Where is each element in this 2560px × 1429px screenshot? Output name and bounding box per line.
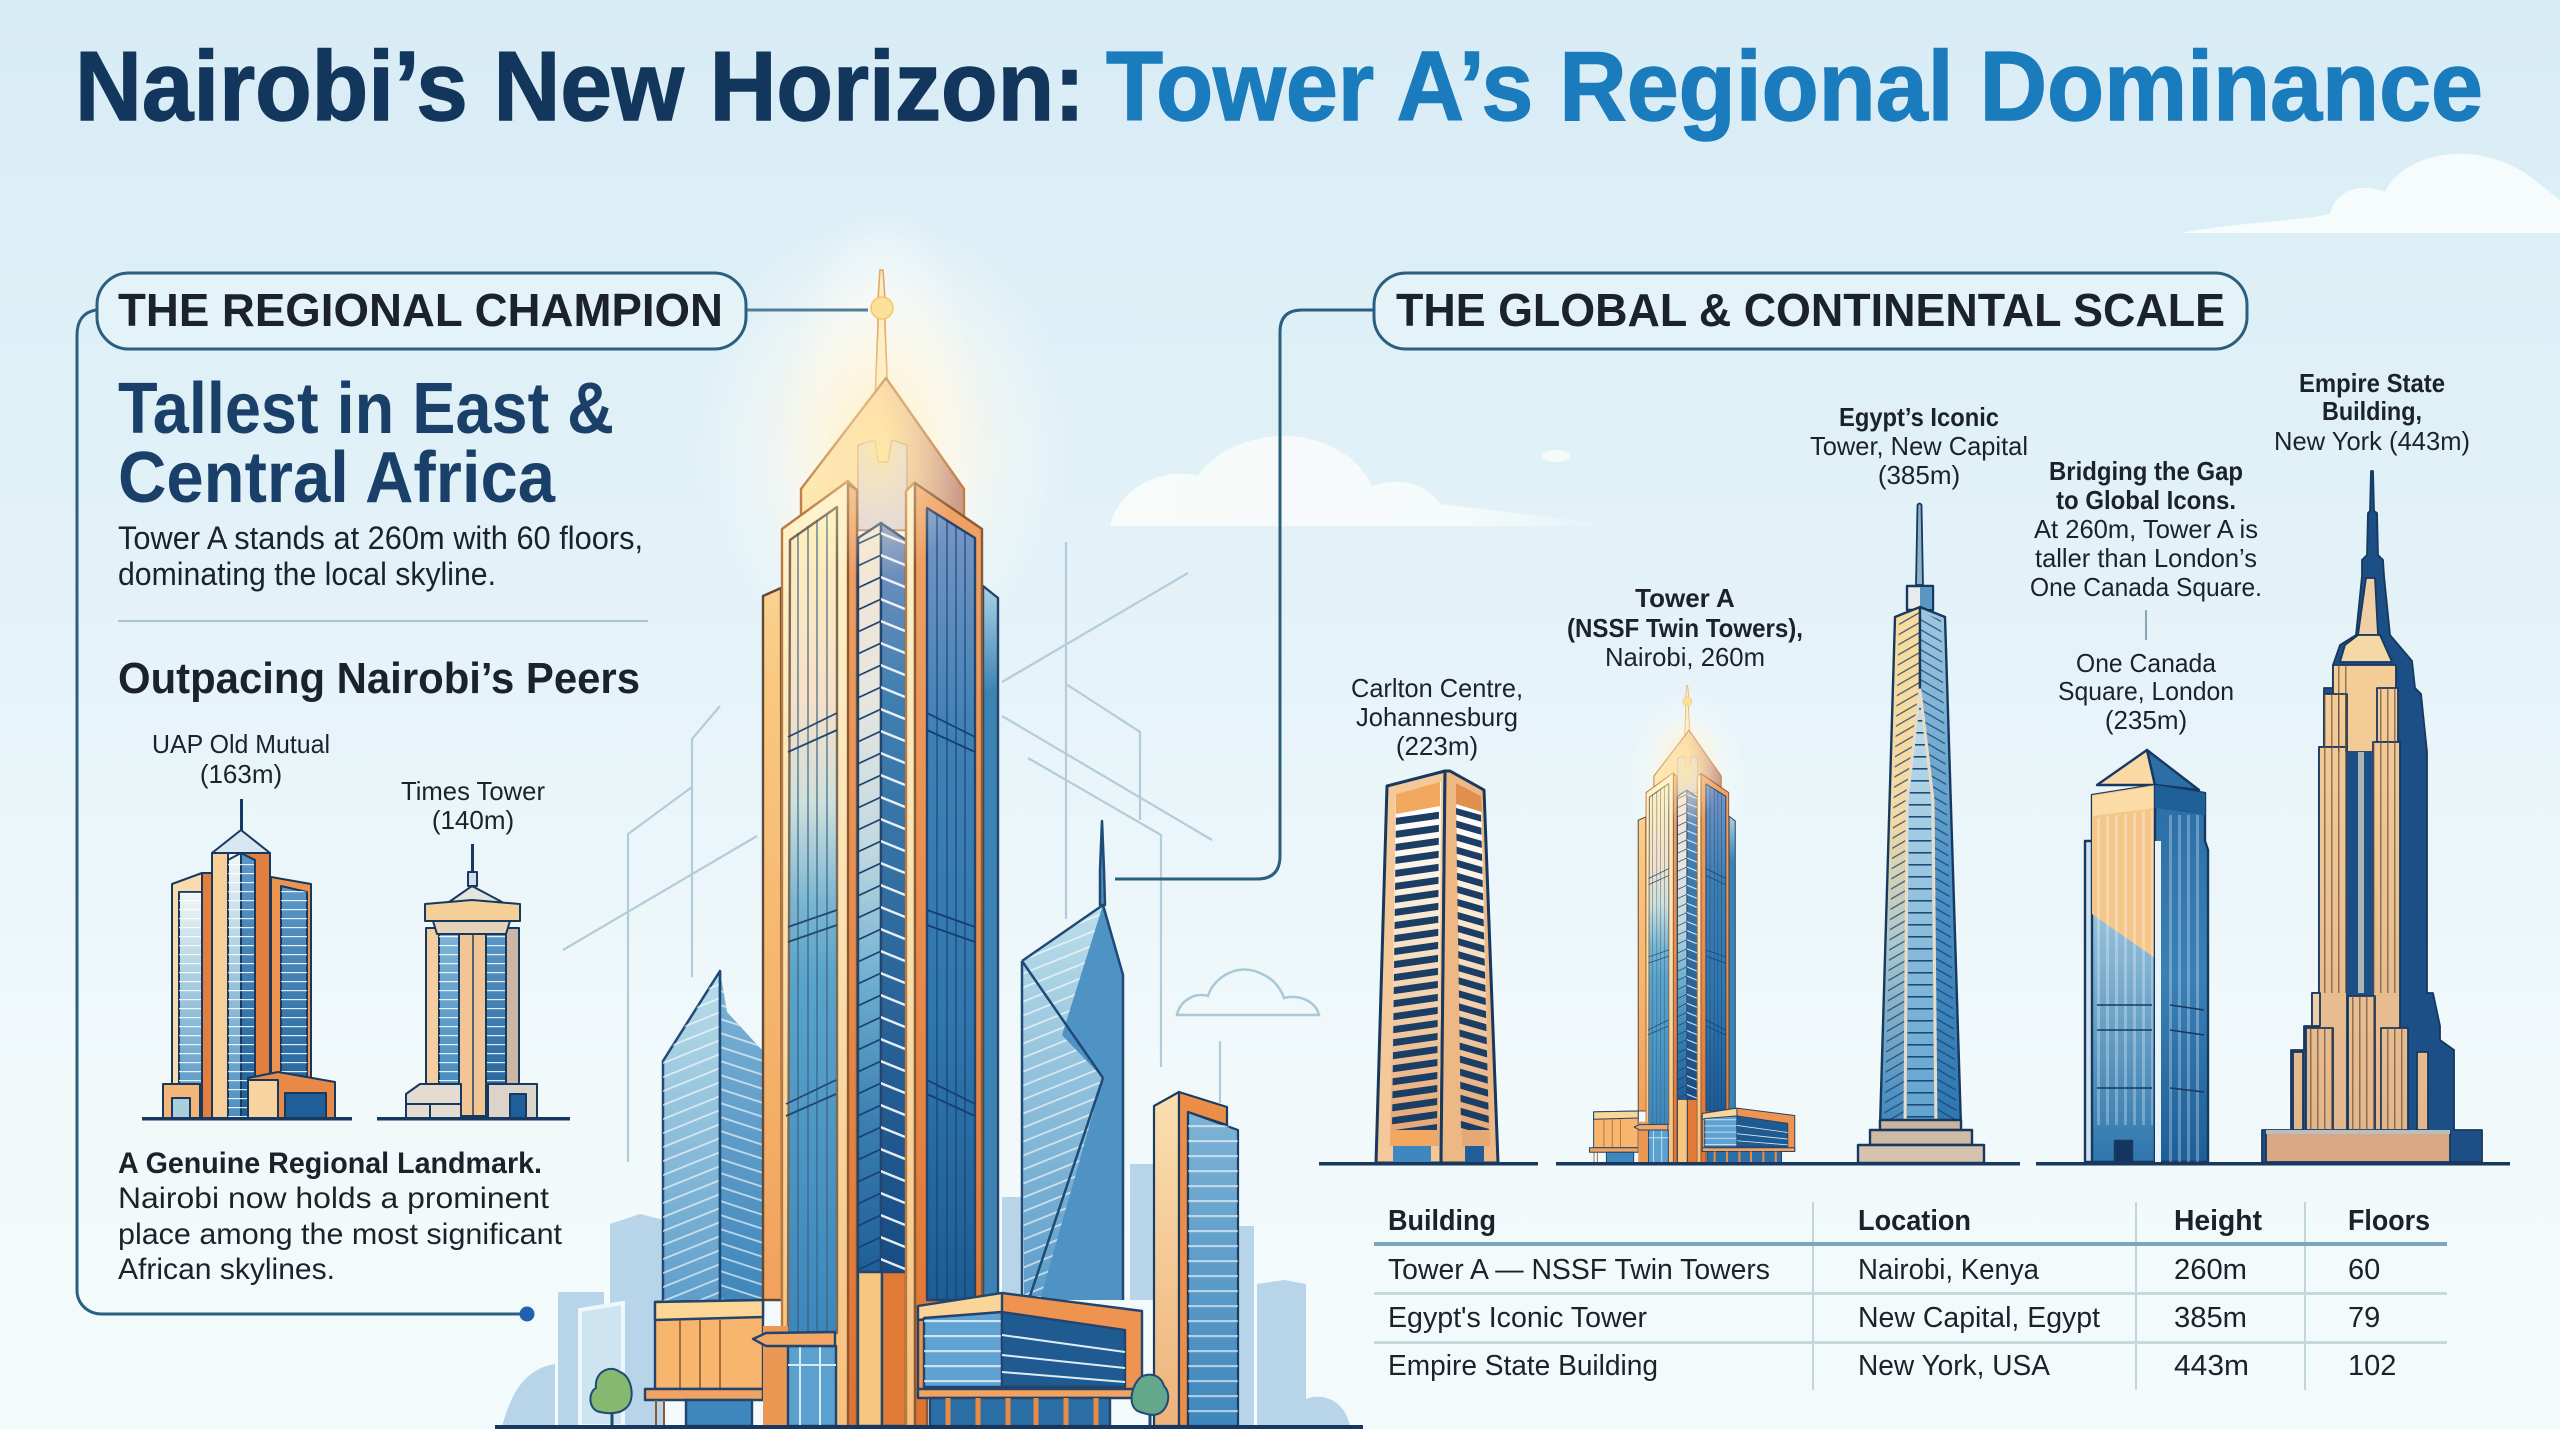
ground line: [495, 1425, 1363, 1429]
label: UAP Old Mutual: [152, 729, 330, 789]
label: Empire State Building: Empire State: [2299, 368, 2445, 398]
background city silhouettes: [502, 1164, 1350, 1426]
center column: [858, 523, 881, 1272]
table row: Empire: 443m: [2174, 1350, 2249, 1382]
label: Empire State Building: New York (443m): [2274, 426, 2470, 456]
table row: Tower A: 260m: [2174, 1254, 2247, 1286]
label: Tower A: (NSSF Twin Towers),: [1567, 613, 1803, 643]
callout: bridging the gap: At 260m, Tower A is: [2034, 514, 2258, 544]
wings: [763, 588, 782, 1300]
text: intro: Tower A stands at 260m with 60 floors,: [118, 520, 643, 556]
table row: Egypt: 79: [2348, 1302, 2380, 1334]
title: [75, 31, 2483, 141]
left podium: [645, 1300, 788, 1426]
building: Egypt's Iconic Tower: [1858, 504, 1984, 1163]
table row: Empire: 102: [2348, 1350, 2396, 1382]
label: One Canada Square: One Canada: [2076, 648, 2217, 678]
building: Times Tower: [406, 844, 537, 1118]
heading: peers: Outpacing Nairobi’s Peers: [118, 654, 640, 703]
label: Carlton Centre: Johannesburg: [1356, 702, 1518, 732]
callout: bridging the gap: One Canada Square.: [2030, 572, 2262, 602]
title: Tower A’s Regional Dominance: [1106, 31, 2483, 141]
construction lines: [563, 542, 1220, 1162]
table header: Height: [2174, 1205, 2262, 1237]
building: right glass spire tower: [1022, 821, 1123, 1300]
panel: regional champion frame: [77, 310, 527, 1314]
text: genuine landmark: A Genuine Regional Landmark.: [118, 1147, 542, 1180]
table row: Tower A: 60: [2348, 1254, 2380, 1286]
label: Carlton Centre: Carlton Centre,: [1351, 673, 1523, 703]
table row: Egypt: 385m: [2174, 1302, 2247, 1334]
text: intro: dominating the local skyline.: [118, 556, 496, 592]
right podium: [918, 1293, 1142, 1426]
label: Tower A: [1567, 583, 1803, 672]
cloud: behind tower: [1110, 436, 1622, 526]
left face: [782, 481, 857, 1426]
table row: Tower A: Nairobi, Kenya: [1858, 1254, 2040, 1286]
text: genuine landmark: African skylines.: [118, 1253, 335, 1286]
connector: pill to spire: [746, 308, 868, 312]
canopy and door: [753, 1332, 836, 1426]
table header: Floors: [2348, 1205, 2430, 1237]
table row: Empire: New York, USA: [1858, 1350, 2051, 1382]
label: Empire State Building: [2274, 368, 2470, 456]
building: UAP Old Mutual: [163, 799, 335, 1118]
table header: Location: [1858, 1205, 1971, 1237]
building: Carlton Centre: [1376, 771, 1498, 1163]
building: One Canada Square: [2085, 750, 2208, 1162]
heading: tallest: [118, 369, 614, 518]
label: UAP Old Mutual: UAP Old Mutual: [152, 729, 330, 759]
table row: Tower A: [1388, 1254, 2380, 1286]
heading: tallest: Tallest in East &: [118, 369, 614, 449]
label: Carlton Centre: (223m): [1396, 731, 1478, 761]
label: Times Tower: (140m): [432, 805, 514, 835]
label: Empire State Building: Building,: [2322, 396, 2422, 426]
trees: [590, 1369, 1168, 1426]
label: UAP Old Mutual: (163m): [200, 759, 282, 789]
heading: tallest: Central Africa: [118, 438, 556, 518]
table row: Tower A: Tower A — NSSF Twin Towers: [1388, 1254, 1770, 1286]
label: Egypt's Iconic Tower: Egypt’s Iconic: [1839, 402, 1999, 432]
cloud: top right: [2180, 154, 2560, 233]
table row: Egypt: New Capital, Egypt: [1858, 1302, 2100, 1334]
label: Carlton Centre: [1351, 673, 1523, 761]
spire: [871, 270, 893, 500]
connector: global panel: [1115, 310, 1373, 879]
cloud: small puff: [1542, 450, 1570, 462]
building: Empire State: [2262, 471, 2482, 1162]
comparison table: [1374, 1202, 2447, 1390]
heading pill: global scale: [1374, 273, 2247, 349]
callout: bridging the gap: to Global Icons.: [2056, 485, 2236, 515]
heading pill: global scale: THE GLOBAL & CONTINENTAL SCALE: [1396, 284, 2225, 336]
building: Tower A small: [1589, 686, 1795, 1163]
text: genuine landmark: Nairobi now holds a prominent: [118, 1182, 550, 1215]
label: One Canada Square: (235m): [2105, 705, 2187, 735]
heading pill: regional champion: THE REGIONAL CHAMPION: [118, 284, 723, 336]
light beam and glow: [692, 200, 1072, 800]
label: Egypt's Iconic Tower: (385m): [1878, 460, 1960, 490]
label: Tower A: Tower A: [1635, 583, 1735, 613]
glow over tower top: [793, 320, 963, 580]
building: right low tower: [1154, 1092, 1238, 1426]
label: One Canada Square: Square, London: [2058, 676, 2234, 706]
frame end dot: [520, 1306, 534, 1322]
callout: bridging the gap: taller than London’s: [2035, 543, 2257, 573]
table row: Egypt: [1388, 1302, 2380, 1334]
crown pyramid: [801, 378, 964, 530]
right face: [906, 483, 915, 1426]
label: Times Tower: [401, 776, 545, 835]
text: genuine landmark: [118, 1147, 563, 1286]
table header: Building: [1388, 1205, 1496, 1237]
label: One Canada Square: [2058, 648, 2234, 735]
label: Tower A: Nairobi, 260m: [1605, 642, 1765, 672]
table rules: [1374, 1202, 2447, 1390]
label: Egypt's Iconic Tower: [1810, 402, 2028, 490]
table row: Empire: [1388, 1350, 2396, 1382]
text: intro: [118, 520, 643, 592]
cloud outline: [1177, 970, 1319, 1015]
callout: bridging the gap: Bridging the Gap: [2049, 456, 2243, 486]
table row: Empire: Empire State Building: [1388, 1350, 1658, 1382]
callout: bridging the gap: [2030, 456, 2262, 602]
building: left glass tower: [663, 971, 762, 1306]
main tower: Tower A: [645, 270, 1142, 1426]
title: Nairobi’s New Horizon:: [75, 31, 1085, 141]
label: Egypt's Iconic Tower: Tower, New Capital: [1810, 431, 2028, 461]
label: Times Tower: Times Tower: [401, 776, 545, 806]
table row: Egypt: Egypt's Iconic Tower: [1388, 1302, 1647, 1334]
text: genuine landmark: place among the most significant: [118, 1218, 563, 1251]
table header: [1388, 1205, 2430, 1237]
heading pill: regional champion: [97, 273, 746, 349]
